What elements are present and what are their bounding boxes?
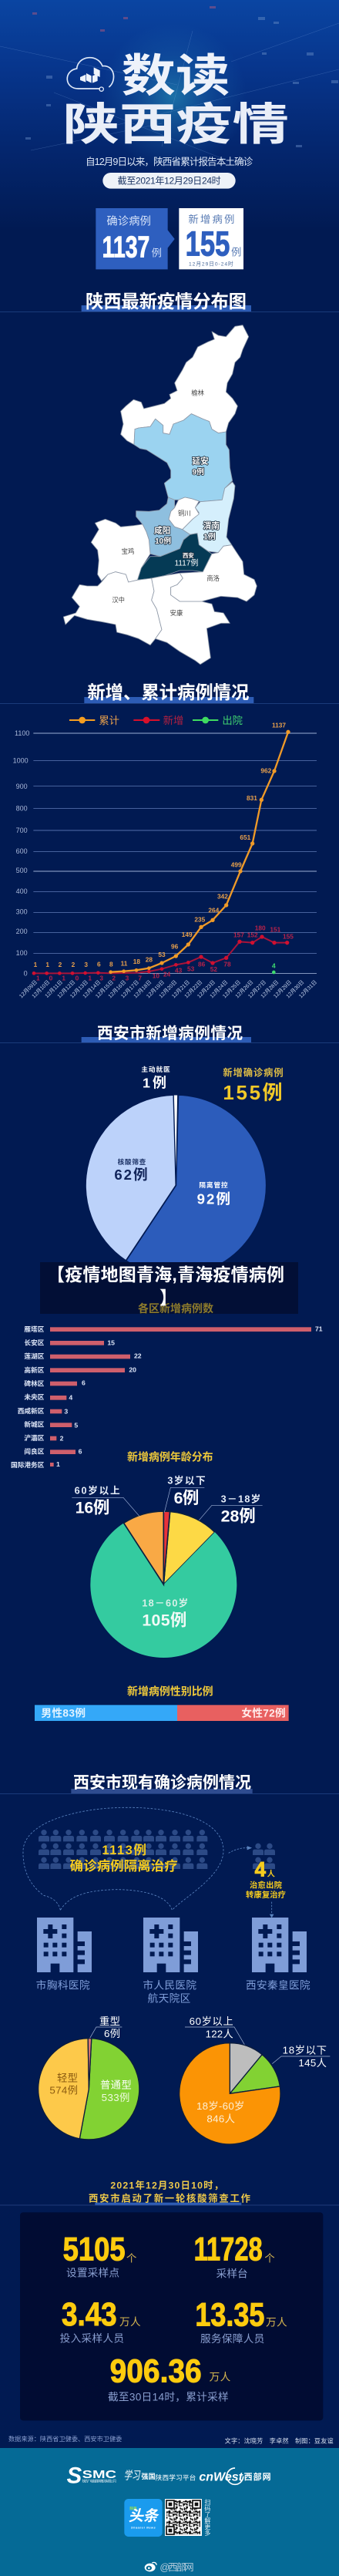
pie: patient age labels: 18岁-60岁 bbox=[196, 2100, 244, 2112]
bar chart: districts: 15 bbox=[107, 1339, 115, 1347]
x axis date labels: 12月28日 bbox=[260, 979, 280, 999]
stat: sampling staff: 3.43 bbox=[62, 2296, 117, 2333]
new case labels: 43 bbox=[175, 967, 183, 975]
label: under 3: 6例 bbox=[174, 1489, 199, 1507]
pie: severity labels: 6例 bbox=[104, 2028, 120, 2039]
region: Xi'an bbox=[137, 534, 212, 580]
x axis date labels: 12月18日 bbox=[133, 979, 153, 999]
panel: sampling stats bbox=[20, 2212, 323, 2420]
new case labels: 3 bbox=[126, 974, 129, 982]
y axis labels: 600 bbox=[16, 847, 28, 855]
chart legend: 出院 bbox=[222, 715, 243, 726]
bar chart: districts: 碑林区 bbox=[24, 1379, 45, 1387]
bar chart: districts: 4 bbox=[69, 1393, 72, 1401]
x axis date labels: 12月25日 bbox=[222, 979, 242, 999]
label: 3-18: 3－18岁 bbox=[221, 1493, 260, 1504]
icon: app logo: 陕西 bbox=[129, 2506, 137, 2511]
logo: study platform bbox=[124, 2469, 196, 2482]
map labels: 西安 bbox=[183, 552, 194, 559]
pie: severity labels bbox=[49, 2015, 132, 2103]
hospital names: 市人民医院 bbox=[143, 1978, 196, 1991]
pie: severity labels: 574例 bbox=[49, 2085, 78, 2096]
stat: sampling staff: 万人 bbox=[119, 2316, 141, 2328]
map labels: 汉中 bbox=[112, 596, 125, 604]
bar chart: districts: 6 bbox=[79, 1448, 82, 1456]
QR code bbox=[165, 2499, 202, 2536]
map labels: 1117例 bbox=[175, 558, 198, 568]
label: quarantine bbox=[197, 1180, 230, 1207]
gender bar bbox=[35, 1705, 289, 1721]
new case labels: 10 bbox=[153, 972, 159, 980]
map labels: 渭南 bbox=[203, 521, 220, 531]
overlay caption: 各区新增病例数 bbox=[138, 1302, 213, 1315]
map labels: 10例 bbox=[155, 536, 171, 546]
logo: study platform: 强国 bbox=[141, 2473, 156, 2480]
cumulative labels: 149 bbox=[182, 931, 193, 938]
section: gender ratio and current cases bbox=[0, 1685, 339, 1918]
x axis date labels: 12月21日 bbox=[171, 979, 191, 999]
callout: isolation treatment: 1113例 bbox=[102, 1843, 146, 1857]
label: quarantine: 92例 bbox=[197, 1191, 230, 1207]
overlay caption: 】 bbox=[159, 1288, 177, 1308]
bar chart: districts: 新城区 bbox=[24, 1419, 45, 1428]
dashed bubble bbox=[23, 1807, 223, 1910]
x axis date labels: 12月27日 bbox=[247, 979, 267, 999]
hospital names bbox=[36, 1978, 310, 2004]
heading: current cases: 西安市现有确诊病例情况 bbox=[73, 1773, 251, 1792]
x axis date labels: 12月09日 bbox=[18, 979, 39, 999]
label: self-reported: 1例 bbox=[143, 1076, 166, 1091]
stat: sampling sites: 个 bbox=[126, 2252, 136, 2264]
cumulative labels: 11 bbox=[121, 959, 128, 967]
bar chart: districts: 6 bbox=[82, 1379, 86, 1387]
icon: weibo bbox=[145, 2562, 156, 2571]
map labels: 安康 bbox=[170, 609, 183, 617]
bar chart: districts: 国际港务区 bbox=[11, 1460, 45, 1469]
cumulative labels: 2 bbox=[59, 961, 62, 968]
cumulative labels: 499 bbox=[231, 860, 242, 868]
bar chart: districts: 长安区 bbox=[24, 1339, 45, 1347]
label: under 3: 3岁以下 bbox=[167, 1474, 206, 1486]
text: screening announcement bbox=[0, 2179, 339, 2205]
map labels: 延安 bbox=[192, 456, 209, 466]
label: over 60: 60岁以上 bbox=[75, 1485, 120, 1497]
map labels: 商洛 bbox=[206, 574, 220, 582]
region: Weinan bbox=[183, 482, 235, 553]
new case labels: 7 bbox=[138, 974, 142, 982]
new case labels: 152 bbox=[247, 931, 258, 939]
bar chart: districts: 未央区 bbox=[24, 1392, 45, 1401]
label: total new: 新增确诊病例 bbox=[223, 1067, 284, 1079]
y axis labels: 200 bbox=[16, 928, 28, 935]
hospital names: 航天院区 bbox=[148, 1992, 190, 2004]
cumulative labels: 342 bbox=[217, 893, 228, 901]
arrow: to discharged bbox=[229, 1847, 251, 1853]
bar chart: districts: 5 bbox=[74, 1421, 78, 1429]
overlay caption bbox=[40, 1262, 298, 1315]
logo: SMC: SMC bbox=[82, 2468, 116, 2481]
label: screening: 核酸筛查 bbox=[118, 1157, 146, 1166]
cumulative labels: 6 bbox=[97, 960, 101, 968]
x axis date labels bbox=[18, 979, 318, 999]
cumulative labels: 3 bbox=[84, 961, 88, 968]
bar chart: districts: 浐灞区 bbox=[24, 1433, 45, 1442]
new case labels: 0 bbox=[49, 974, 53, 982]
map labels: 宝鸡 bbox=[122, 547, 134, 555]
card: new cases: 新增病例 bbox=[188, 214, 234, 225]
new case labels: 180 bbox=[255, 924, 266, 932]
label: total new: 155例 bbox=[223, 1081, 283, 1104]
header block bbox=[0, 51, 339, 312]
y axis labels bbox=[13, 729, 29, 977]
map labels: 铜川 bbox=[178, 510, 191, 517]
heading: age: 新增病例年龄分布 bbox=[127, 1451, 213, 1463]
stat: sampling staff: 投入采样人员 bbox=[60, 2332, 124, 2344]
pie: patient age bbox=[180, 2043, 280, 2144]
stat: support staff: 13.35 bbox=[195, 2297, 264, 2334]
label: 18-60: 18－60岁 bbox=[142, 1597, 188, 1608]
x axis date labels: 12月24日 bbox=[209, 979, 229, 999]
footer bbox=[0, 2435, 339, 2576]
region: Yulin bbox=[121, 325, 249, 445]
label: screening: 62例 bbox=[114, 1167, 148, 1183]
callout: isolation treatment bbox=[70, 1843, 178, 1874]
y axis labels: 1100 bbox=[15, 729, 29, 737]
text: screening announcement: 2021年12月30日10时， bbox=[110, 2179, 223, 2190]
bar chart: districts: 20 bbox=[129, 1365, 136, 1373]
card: new cases: 12月29日0-24时 bbox=[189, 260, 233, 267]
line: new cases bbox=[32, 934, 289, 975]
x axis date labels: 12月15日 bbox=[95, 979, 115, 999]
region: Hanzhong bbox=[63, 572, 162, 645]
label: under 3 bbox=[167, 1474, 206, 1507]
pie: severity labels: 重型 bbox=[99, 2015, 120, 2027]
new case labels: 157 bbox=[233, 931, 244, 939]
pie: age groups bbox=[90, 1511, 237, 1658]
new case labels: 1 bbox=[36, 974, 40, 982]
leader lines bbox=[72, 1487, 263, 1520]
logo: SMC bbox=[67, 2463, 116, 2489]
footer band bbox=[0, 2448, 339, 2576]
card: new cases: 155 bbox=[186, 224, 230, 264]
x axis date labels: 12月14日 bbox=[82, 979, 102, 999]
title line 2: 陕西疫情 bbox=[63, 100, 289, 150]
map of Shaanxi bbox=[63, 325, 257, 665]
stat: total sampled: 906.36 bbox=[110, 2352, 202, 2389]
icon: app logo: Shaanxi News bbox=[131, 2527, 156, 2530]
label: 18-60 bbox=[142, 1597, 188, 1630]
card: new cases bbox=[179, 208, 243, 269]
card: new cases: 例 bbox=[231, 247, 241, 258]
x axis date labels: 12月31日 bbox=[298, 979, 318, 999]
chart legend bbox=[69, 715, 243, 726]
hospital icons bbox=[37, 1918, 307, 1972]
weibo handle: @西部网 bbox=[159, 2562, 194, 2573]
pie: patient age labels: 60岁以上 bbox=[190, 2015, 233, 2027]
label: screening bbox=[114, 1157, 148, 1183]
y axis labels: 0 bbox=[24, 969, 28, 977]
region: Xianyang bbox=[136, 497, 190, 557]
credits: 文字：沈晓芳 李卓然 制图：豆友谊 bbox=[225, 2436, 334, 2444]
new case labels: 53 bbox=[187, 965, 195, 972]
date pill bbox=[102, 173, 236, 189]
label: quarantine: 隔离管控 bbox=[199, 1180, 228, 1189]
discharged point: 4 bbox=[272, 962, 276, 970]
x axis date labels: 12月19日 bbox=[146, 979, 166, 999]
section: hospitals and case types bbox=[0, 1978, 339, 2420]
label: over 60 bbox=[75, 1485, 120, 1517]
stat: sampling sites: 5105 bbox=[63, 2231, 126, 2268]
logo: cnwest: 西部网 bbox=[244, 2471, 271, 2482]
overlay caption: 【疫情地图青海,青海疫情病例 bbox=[47, 1264, 284, 1285]
label: 3-18 bbox=[221, 1493, 260, 1526]
hospital names: 西安秦皇医院 bbox=[246, 1979, 310, 1991]
heading: map bbox=[0, 291, 339, 312]
new case labels: 78 bbox=[223, 960, 231, 968]
chart legend: 新增 bbox=[163, 715, 183, 726]
map labels: 咸阳 bbox=[154, 526, 170, 536]
label: self-reported: 主动就医 bbox=[141, 1065, 170, 1073]
card: confirmed cases: 例 bbox=[152, 247, 162, 259]
bar chart: districts: 71 bbox=[315, 1325, 323, 1333]
pie: patient age labels: 145人 bbox=[298, 2057, 327, 2069]
section: Xi'an new cases bbox=[0, 1024, 339, 1276]
bar chart: districts bbox=[11, 1325, 323, 1469]
pie: patient age labels bbox=[185, 2015, 330, 2125]
logo: cnwest: cnWest bbox=[199, 2470, 243, 2483]
bar chart: districts: 莲湖区 bbox=[24, 1352, 45, 1360]
people: discharged bbox=[253, 1844, 275, 1869]
region: Ankang bbox=[152, 573, 230, 665]
x axis date labels: 12月12日 bbox=[56, 979, 76, 999]
icon: cloud with cubes bbox=[67, 58, 114, 91]
stat: sampling staff bbox=[60, 2296, 141, 2344]
stat: sampling stations: 11728 bbox=[194, 2231, 263, 2268]
logo: cnwest bbox=[199, 2468, 271, 2484]
pie: patient age labels: 122人 bbox=[206, 2029, 233, 2040]
line: cumulative cases bbox=[109, 730, 290, 974]
text: screening announcement: 西安市启动了新一轮核酸筛查工作 bbox=[89, 2192, 250, 2204]
chart legend: 累计 bbox=[99, 715, 119, 726]
heading: map: 陕西最新疫情分布图 bbox=[86, 291, 247, 311]
y axis labels: 800 bbox=[16, 805, 28, 813]
x axis date labels: 12月26日 bbox=[234, 979, 254, 999]
x axis date labels: 12月29日 bbox=[273, 979, 293, 999]
stat: total sampled bbox=[108, 2352, 231, 2403]
new case labels: 2 bbox=[112, 974, 116, 982]
new case labels: 155 bbox=[283, 932, 294, 940]
section: new and cumulative line chart bbox=[0, 682, 339, 999]
label: 18-60: 105例 bbox=[142, 1611, 186, 1630]
people grid bbox=[39, 1830, 207, 1869]
cumulative labels bbox=[34, 721, 286, 968]
pie: severity labels: 轻型 bbox=[57, 2072, 78, 2083]
callout: discharged: 治愈出院 bbox=[250, 1880, 283, 1890]
y axis labels: 400 bbox=[16, 887, 28, 895]
logo: SMC: S bbox=[67, 2463, 82, 2489]
card: confirmed cases: 确诊病例 bbox=[106, 215, 151, 228]
arrow: to hospital bbox=[270, 1902, 274, 1918]
heading: Xi'an new cases bbox=[0, 1024, 339, 1043]
pie: severity bbox=[39, 2039, 139, 2140]
cumulative labels: 831 bbox=[247, 794, 257, 802]
stat: support staff: 服务保障人员 bbox=[200, 2333, 264, 2345]
cumulative labels: 18 bbox=[133, 958, 140, 965]
label: over 60: 16例 bbox=[76, 1499, 109, 1517]
cumulative labels: 1 bbox=[34, 961, 38, 968]
pie: source of cases bbox=[86, 1095, 267, 1276]
heading: gender: 新增病例性别比例 bbox=[127, 1685, 213, 1697]
card: confirmed cases: 1137 bbox=[102, 230, 149, 264]
logo: SMC: 陕西广电融媒体集团有限公司 bbox=[82, 2478, 116, 2483]
new case labels: 24 bbox=[163, 971, 171, 978]
new case labels: 1 bbox=[88, 974, 92, 982]
y axis labels: 300 bbox=[16, 907, 28, 915]
region: Shangluo bbox=[171, 545, 257, 601]
card: confirmed cases bbox=[96, 208, 175, 269]
map labels: 榆林 bbox=[191, 389, 205, 396]
new case labels: 52 bbox=[210, 965, 217, 973]
date pill: 截至2021年12月29日24时 bbox=[118, 176, 221, 187]
new case labels: 151 bbox=[270, 925, 281, 933]
title line 1: 数读 bbox=[122, 51, 230, 101]
pie: patient age labels: 846人 bbox=[206, 2113, 235, 2125]
gender bar: 男性83例 bbox=[41, 1707, 86, 1719]
y axis labels: 900 bbox=[16, 783, 28, 790]
bar chart: districts: 西咸新区 bbox=[18, 1406, 45, 1415]
y axis labels: 500 bbox=[16, 867, 28, 874]
callout: discharged: 4 bbox=[255, 1857, 266, 1881]
bar chart: districts: 高新区 bbox=[24, 1365, 45, 1374]
label: self-reported bbox=[141, 1065, 170, 1091]
icon: app logo: 头条 bbox=[129, 2507, 159, 2524]
stat: sampling stations: 采样台 bbox=[216, 2268, 248, 2280]
bar chart: districts: 雁塔区 bbox=[24, 1325, 45, 1333]
new case labels: 1 bbox=[62, 974, 65, 982]
header background bbox=[0, 0, 339, 231]
new case labels: 3 bbox=[99, 974, 103, 982]
cumulative labels: 1 bbox=[45, 961, 49, 968]
map labels: 9例 bbox=[193, 466, 204, 476]
vertical caption: 扫码了解更多 bbox=[204, 2498, 210, 2537]
map labels: 1例 bbox=[203, 531, 216, 541]
subtitle: 自12月9日以来，陕西省累计报告本土确诊 bbox=[86, 156, 253, 167]
stat: support staff: 万人 bbox=[266, 2317, 287, 2329]
stat: support staff bbox=[195, 2297, 287, 2345]
cumulative labels: 235 bbox=[194, 916, 206, 924]
logo: study platform: 陕西学习平台 bbox=[156, 2473, 196, 2482]
y axis labels: 700 bbox=[16, 827, 28, 834]
section: age distribution bbox=[72, 1451, 263, 1658]
cumulative labels: 2 bbox=[72, 961, 76, 968]
bar chart: districts: 22 bbox=[134, 1352, 142, 1360]
data source: 数据来源：陕西省卫健委、西安市卫健委 bbox=[8, 2435, 122, 2443]
pie: severity labels: 533例 bbox=[102, 2092, 129, 2103]
heading: Xi'an new cases: 西安市新增病例情况 bbox=[97, 1024, 243, 1042]
x axis date labels: 12月30日 bbox=[285, 979, 305, 999]
callout: discharged bbox=[246, 1857, 286, 1900]
gender bar: 女性72例 bbox=[241, 1706, 286, 1719]
y axis labels: 100 bbox=[16, 949, 28, 957]
discharged point bbox=[272, 962, 276, 974]
bar chart: districts: 阎良区 bbox=[24, 1446, 45, 1455]
x axis date labels: 12月17日 bbox=[120, 979, 140, 999]
x axis date labels: 12月20日 bbox=[158, 979, 178, 999]
new case labels: 0 bbox=[76, 974, 79, 982]
logo: study platform: 学习 bbox=[124, 2469, 141, 2482]
new case labels bbox=[36, 924, 294, 982]
bar chart: districts: 1 bbox=[56, 1460, 60, 1468]
region: Baoji bbox=[91, 519, 150, 582]
cumulative labels: 96 bbox=[171, 943, 179, 951]
callout: discharged: 人 bbox=[267, 1869, 276, 1878]
heading: trend: 新增、累计病例情况 bbox=[87, 682, 249, 702]
cumulative labels: 962 bbox=[260, 766, 272, 774]
x axis date labels: 12月22日 bbox=[183, 979, 203, 999]
x axis date labels: 12月10日 bbox=[31, 979, 51, 999]
cumulative labels: 53 bbox=[158, 951, 166, 958]
bar chart: districts: 2 bbox=[60, 1435, 64, 1443]
label: total new bbox=[223, 1067, 284, 1104]
heading: current cases bbox=[0, 1773, 339, 1794]
region: Tongchuan bbox=[169, 497, 199, 530]
cumulative labels: 8 bbox=[109, 960, 113, 968]
stat: sampling stations: 个 bbox=[264, 2252, 275, 2264]
stat: total sampled: 截至30日14时，累计采样 bbox=[108, 2392, 229, 2403]
hospital names: 市胸科医院 bbox=[36, 1978, 90, 1991]
pie: patient age labels: 18岁以下 bbox=[283, 2045, 327, 2056]
stat: sampling sites: 设置采样点 bbox=[66, 2268, 119, 2279]
x axis date labels: 12月16日 bbox=[107, 979, 127, 999]
cumulative labels: 651 bbox=[240, 833, 251, 841]
cumulative labels: 1137 bbox=[272, 721, 286, 729]
bar chart: districts: 3 bbox=[64, 1407, 68, 1415]
map labels bbox=[112, 389, 220, 617]
x axis date labels: 12月23日 bbox=[196, 979, 216, 999]
cumulative labels: 264 bbox=[208, 906, 220, 914]
callout: isolation treatment: 确诊病例隔离治疗 bbox=[70, 1858, 178, 1874]
region: Yan'an bbox=[134, 414, 233, 502]
heading: trend bbox=[0, 682, 339, 704]
icon: app logo bbox=[124, 2499, 163, 2537]
cumulative labels: 28 bbox=[146, 955, 153, 963]
new case labels: 86 bbox=[198, 960, 206, 968]
label: 3-18: 28例 bbox=[221, 1507, 256, 1526]
pie: severity labels: 普通型 bbox=[100, 2079, 132, 2091]
y axis labels: 1000 bbox=[13, 756, 29, 764]
grid lines bbox=[33, 733, 317, 973]
callout: discharged: 转康复治疗 bbox=[246, 1890, 286, 1900]
x axis date labels: 12月11日 bbox=[44, 979, 64, 999]
x axis date labels: 12月13日 bbox=[69, 979, 89, 999]
stat: total sampled: 万人 bbox=[210, 2372, 231, 2383]
